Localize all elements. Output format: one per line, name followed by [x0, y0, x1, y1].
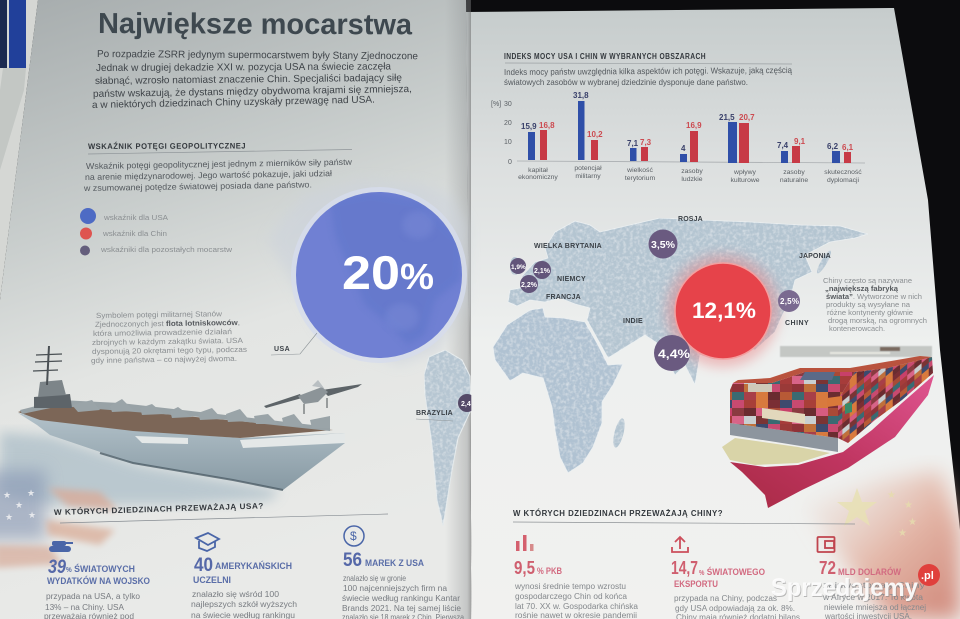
- text: factory of the world: świata”. Wytworzone w nich: [826, 292, 922, 301]
- map: South America: 2,4: [461, 401, 471, 408]
- text: index description: w zsumowanej potędze światowej posiada dane państwo.: [83, 179, 312, 193]
- intro text: a w niektórych dziedzinach Chiny uzyskały przewagę nad USA.: [92, 95, 375, 111]
- text: factory of the world: różne kontynenty głównie: [827, 308, 913, 317]
- bars: economic capital: 15,9: [521, 122, 537, 131]
- text: factory of the world: drogą morską, na ogromnych: [828, 316, 927, 325]
- column: exports: 14,7: [671, 558, 698, 578]
- column: GDP growth: % PKB: [537, 566, 562, 577]
- column: military spending: [44, 541, 150, 619]
- indicator circle: USA 20%: 20: [342, 246, 400, 299]
- China flag background: ★: [898, 528, 907, 539]
- faint map of North America around the circle: [268, 180, 468, 365]
- bars: military potential: potencjał: [574, 165, 602, 172]
- bars: cultural influence: 21,5: [719, 113, 735, 122]
- bar chart: [491, 91, 865, 184]
- bars: territory: [625, 138, 655, 182]
- text: aircraft carrier fleet: zbrojnych w każdym zakątku świata. USA: [92, 336, 243, 347]
- legend: [80, 208, 233, 256]
- illustration: aircraft carrier: [18, 346, 345, 490]
- column: military spending: 39: [48, 557, 66, 578]
- column: exports: % ŚWIATOWEGO: [699, 566, 765, 578]
- column: military spending: WYDATKÓW NA WOJSKO: [47, 575, 150, 587]
- legend: wskaźnik dla USA: [103, 213, 168, 222]
- container tops: [733, 356, 932, 383]
- text: factory of the world: „największą fabryką: [825, 284, 899, 293]
- map labels: ROSJA: [678, 216, 703, 223]
- column: African investment: w Afryce w 2017. To kwota: [822, 593, 924, 602]
- text: chart description: światowych zasobów w wybranej dziedzinie dysponuje dane państwo.: [504, 77, 748, 87]
- bars: human resources: 16,9: [686, 121, 702, 130]
- spine shadow: [445, 0, 471, 619]
- bars: territory: wielkość: [626, 167, 653, 174]
- indicator circle: France 2,2%: 2,2%: [521, 282, 538, 289]
- text: aircraft carrier fleet: Symbolem potęgi militarnej Stanów: [96, 309, 223, 320]
- intro text: Po rozpadzie ZSRR jedynym supermocarstwem były Stany Zjednoczone: [97, 49, 418, 62]
- icon: bars: [516, 535, 534, 551]
- bar chart: 30: [504, 101, 512, 108]
- column: African investment: 72: [819, 558, 836, 578]
- column: exports: [671, 537, 800, 619]
- water under the carrier: [0, 432, 280, 505]
- column: universities: UCZELNI: [193, 575, 231, 586]
- China flag background: [805, 470, 960, 619]
- bars: territory: terytorium: [625, 175, 655, 182]
- bar chart: 20: [504, 120, 512, 127]
- column: military spending: 13% – na Chiny. USA: [45, 603, 125, 612]
- bars: territory: 7,1: [627, 139, 639, 148]
- text: chart description: [504, 65, 792, 87]
- bars: military potential: 10,2: [587, 130, 603, 139]
- column: brands: świecie według rankingu Kantar: [342, 594, 460, 603]
- column: exports: gdy USA odpowiadają za ok. 8%.: [675, 604, 795, 613]
- heading: USA advantages: W KTÓRYCH DZIEDZINACH PRZEWAŻAJĄ USA?: [54, 501, 264, 517]
- column: African investment: MLD DOLARÓW: [838, 566, 901, 578]
- column: brands: MAREK Z USA: [365, 558, 424, 569]
- heading: geopolitical power index: WSKAŹNIK POTĘGI GEOPOLITYCZNEJ: [88, 141, 246, 151]
- US flag background: ★: [3, 490, 11, 500]
- map labels: INDIE: [623, 318, 643, 325]
- bars: cultural influence: wpływy: [733, 169, 757, 176]
- China flag background: ★: [904, 500, 913, 511]
- bars: diplomatic effectiveness: skuteczność: [824, 169, 862, 176]
- icon: upload arrow: [672, 537, 688, 552]
- intro text: Jednak w drugiej dekadzie XXI w. pozycja USA na świecie zaczęła: [96, 61, 391, 74]
- map labels: FRANCJA: [546, 294, 581, 301]
- indicator circle: UK 1,9%: [510, 258, 526, 274]
- title: Największe mocarstwa: [98, 8, 413, 41]
- indicator circle: China 12,1%: [667, 255, 779, 367]
- icon: dollar coin: $: [350, 529, 357, 543]
- column: GDP growth: wynosi średnie tempo wzrostu: [514, 582, 626, 591]
- bars: natural resources: zasoby: [783, 169, 805, 176]
- indicator circle: Russia 3,5%: [648, 230, 678, 258]
- label: Brazil: [416, 410, 453, 421]
- bars: diplomatic effectiveness: 6,2: [827, 142, 839, 151]
- China flag background: ★: [887, 490, 896, 501]
- map labels: [534, 216, 831, 327]
- bars: natural resources: naturalne: [780, 177, 808, 184]
- map labels: CHINY: [785, 320, 809, 327]
- bars: cultural influence: kulturowe: [730, 177, 760, 184]
- text: index description: Wskaźnik potęgi geopolitycznej jest jednym z mierników siły państw: [86, 157, 353, 171]
- China flag background: ★: [908, 517, 917, 528]
- world map: Eurasia and Africa: [493, 218, 868, 473]
- text: factory of the world: kontenerowcach.: [829, 324, 885, 333]
- indicator circle: Japan 2,5%: 2,5%: [780, 297, 799, 306]
- text: factory of the world: Chiny często są nazywane: [823, 276, 912, 285]
- bar chart: 10: [504, 139, 512, 146]
- column: brands: 56: [343, 550, 362, 571]
- bars: military potential: 31,8: [573, 91, 589, 100]
- column: military spending: % ŚWIATOWYCH: [66, 563, 135, 575]
- column: GDP growth: gospodarczego Chin od końca: [515, 592, 628, 601]
- bars: diplomatic effectiveness: dyplomacji: [827, 177, 860, 184]
- column: brands: [342, 526, 464, 619]
- watermark: Sprzedajemy.pl: Sprzedajemy: [772, 575, 919, 603]
- watermark: Sprzedajemy.pl: [771, 564, 940, 603]
- column: brands: Brands 2021. Na tej samej liście: [342, 604, 462, 613]
- heading: power index USA and China: INDEKS MOCY USA I CHIN W WYBRANYCH OBSZARACH: [504, 52, 706, 61]
- column: universities: [191, 533, 297, 619]
- left page: [0, 0, 472, 619]
- bars: human resources: 4: [681, 144, 686, 153]
- bars: cultural influence: 20,7: [739, 113, 755, 122]
- text: aircraft carrier fleet: która umożliwia prowadzenie działań: [93, 327, 232, 338]
- indicator circle: USA 20%: %: [400, 256, 434, 297]
- indicator circle: France 2,2%: [520, 275, 538, 293]
- column: universities: 40: [194, 555, 213, 576]
- indicator circle: UK 1,9%: 1,9%: [511, 264, 526, 271]
- bars: natural resources: 9,1: [794, 137, 806, 146]
- legend: wskaźnik dla Chin: [102, 229, 167, 238]
- column: universities: znalazło się wśród 100: [192, 590, 280, 599]
- column: GDP growth: lat 70. XX w. Gospodarka chińska: [515, 602, 639, 611]
- label: USA: USA: [274, 346, 290, 353]
- bars: economic capital: kapitał: [528, 167, 548, 174]
- column: brands: znalazło się w gronie: [343, 574, 406, 583]
- indicator circle: Germany 2,1%: [533, 261, 551, 279]
- US flag background: [0, 470, 118, 568]
- column: African investment: zainwestowały Chiny: [823, 581, 925, 590]
- column: African investment: [818, 537, 926, 619]
- container stacks, front: [730, 372, 855, 438]
- map labels: JAPONIA: [799, 253, 831, 260]
- bars: diplomatic effectiveness: [824, 142, 862, 184]
- page stack on the left: [0, 0, 38, 300]
- indicator circle: Japan 2,5%: [778, 290, 800, 312]
- bars: natural resources: [777, 137, 808, 184]
- bars: natural resources: 7,4: [777, 141, 789, 150]
- bars: economic capital: [518, 121, 558, 181]
- text: chart description: Indeks mocy państw uwzględnia kilka aspektów ich potęgi. Wskazuje, jaką częścią: [504, 65, 792, 77]
- column: universities: najlepszych szkół wyższych: [191, 600, 297, 609]
- watermark: Sprzedajemy.pl: Sprzedajemy: [771, 574, 918, 602]
- US flag background: ★: [28, 510, 36, 520]
- bars: military potential: militarny: [575, 173, 601, 180]
- text: aircraft carrier fleet: dysponują 20 okrętami tego typu, podczas: [92, 345, 247, 356]
- bars: military potential: [573, 91, 603, 180]
- bars: cultural influence: [719, 113, 760, 184]
- intro text: [92, 49, 418, 111]
- column: exports: przypada na Chiny, podczas: [674, 594, 777, 603]
- bars: economic capital: 16,8: [539, 121, 555, 130]
- icon: wallet: [818, 537, 834, 552]
- bars: economic capital: ekonomiczny: [518, 174, 558, 181]
- text: factory of the world: [823, 276, 927, 333]
- indicator circle: India 4,4%: 4,4%: [658, 347, 690, 361]
- text: index description: [83, 157, 353, 193]
- column: universities: AMERYKAŃSKICH: [215, 561, 292, 572]
- indicator circle: Russia 3,5%: 3,5%: [651, 240, 675, 251]
- watermark: Sprzedajemy.pl: .pl: [921, 570, 934, 582]
- text: factory of the world: produkty są wysyłane na: [826, 300, 911, 309]
- bar chart: 0: [508, 159, 512, 166]
- icon: tank: [49, 541, 73, 552]
- text: aircraft carrier fleet: Zjednoczonych jest flota lotniskowców ,: [95, 318, 240, 329]
- bars: human resources: zasoby: [681, 168, 703, 175]
- bars: territory: 7,3: [640, 138, 652, 147]
- bar chart: [%]: [491, 101, 501, 108]
- bow deck: [722, 438, 830, 465]
- legend: wskaźniki dla pozostałych mocarstw: [100, 245, 233, 254]
- US flag background: ★: [27, 488, 35, 498]
- indicator circle: USA 20%: [291, 187, 467, 363]
- column: brands: 100 najcenniejszych firm na: [343, 584, 448, 593]
- column: GDP growth: 9,5: [514, 558, 535, 578]
- map labels: WIELKA BRYTANIA: [534, 243, 602, 250]
- illustration: container ship: [722, 346, 934, 508]
- icon: graduation cap: [196, 533, 219, 551]
- bars: diplomatic effectiveness: 6,1: [842, 143, 854, 152]
- map labels: NIEMCY: [557, 276, 586, 283]
- grey superstructure band: [730, 423, 838, 452]
- column: GDP growth: [514, 535, 639, 619]
- text: index description: na arenie międzynarodowej. Jego wartość pokazuje, jaki udział: [85, 168, 332, 182]
- US flag background: ★: [15, 500, 23, 510]
- bars: human resources: [680, 121, 703, 183]
- bars: human resources: ludzkie: [681, 176, 703, 183]
- column: military spending: przypada na USA, a tylko: [46, 592, 141, 601]
- map: South America: [424, 350, 476, 526]
- label: USA: [271, 333, 317, 355]
- intro text: słabnąć, wzrosło natomiast znaczenie Chin. Specjaliści badający siłę: [95, 73, 402, 87]
- text: aircraft carrier fleet: gdy inne państwa – co najwyżej dwoma.: [91, 354, 237, 365]
- column: African investment: niewiele mniejsza od łącznej: [824, 603, 926, 612]
- heading: China advantages: W KTÓRYCH DZIEDZINACH PRZEWAŻAJĄ CHINY?: [513, 509, 723, 518]
- US flag background: ★: [5, 512, 13, 522]
- right page: [466, 8, 960, 619]
- column: exports: EKSPORTU: [674, 579, 718, 590]
- indicator circle: China 12,1%: 12,1%: [692, 298, 756, 323]
- indicator circle: India 4,4%: [654, 335, 690, 371]
- port on the horizon: [780, 346, 932, 357]
- label: Brazil: BRAZYLIA: [416, 410, 453, 417]
- illustration: fighter jet: [264, 380, 362, 414]
- hull: [730, 375, 934, 508]
- text: aircraft carrier fleet: [91, 309, 247, 365]
- container stacks, side: [838, 357, 933, 443]
- indicator circle: Germany 2,1%: 2,1%: [534, 268, 551, 275]
- intro text: państw wskazują, że dystans między obydwoma krajami się zmniejsza,: [93, 84, 412, 100]
